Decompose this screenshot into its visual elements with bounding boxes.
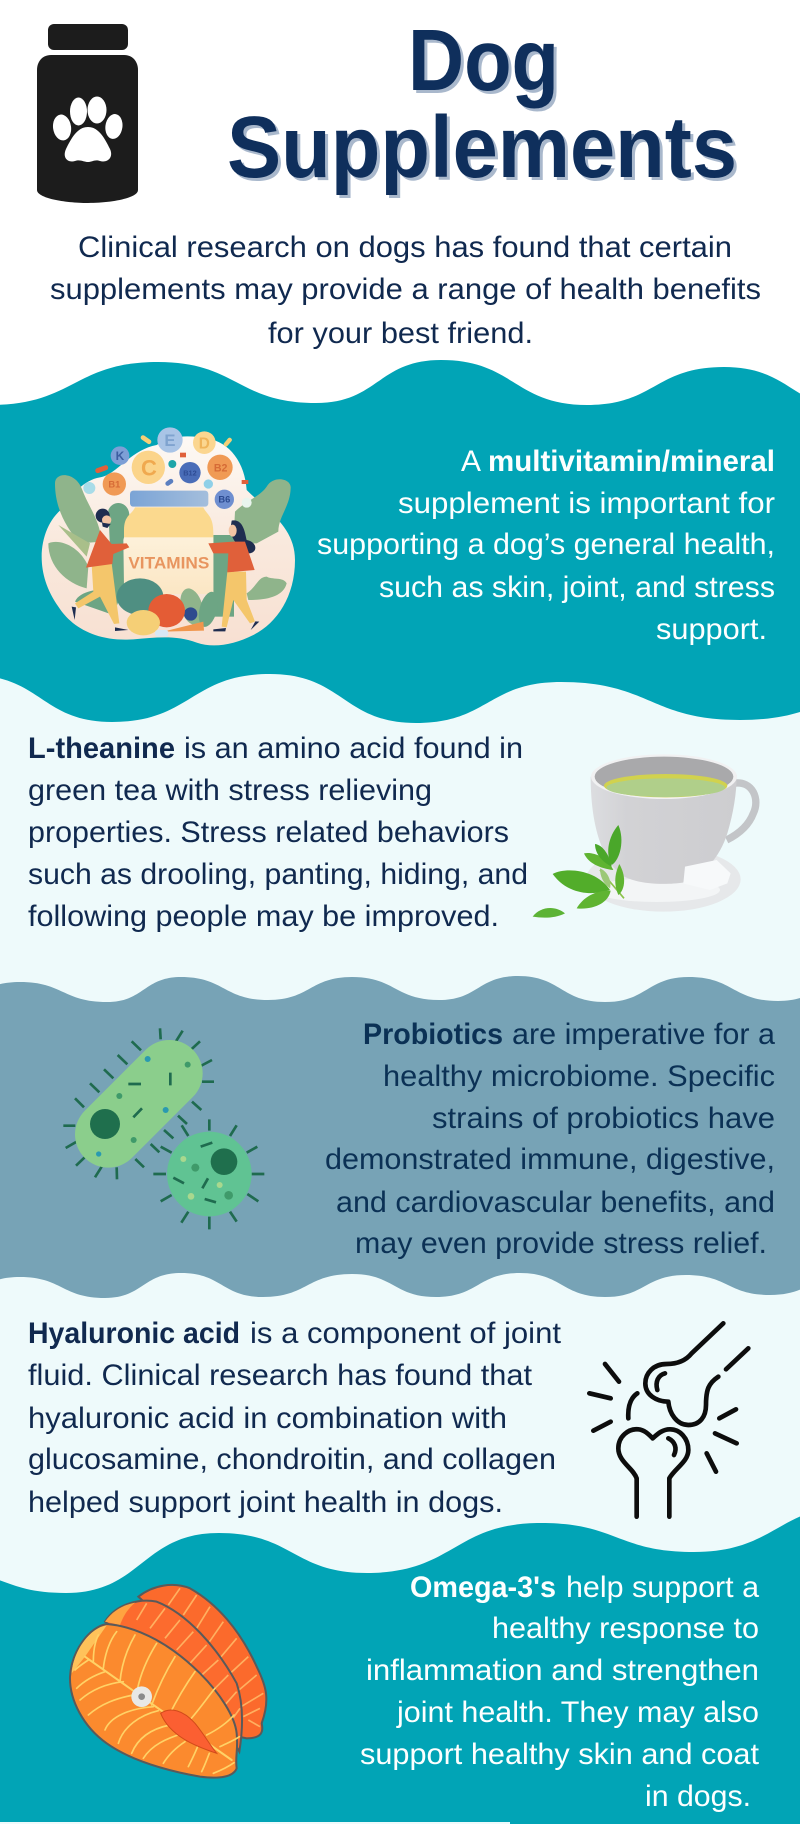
text: L-theanine: following people may be improved. <box>28 900 499 933</box>
text: hyaluronic acid: fluid. Clinical research has found that <box>28 1359 532 1392</box>
text: hyaluronic acid <box>28 1317 561 1519</box>
icon: green tea cup <box>533 754 756 918</box>
title <box>227 12 737 196</box>
icon: joint bones <box>589 1323 748 1517</box>
icon: vitamins illustration: B12 <box>183 468 197 477</box>
text: L-theanine: properties. Stress related behaviors <box>28 816 509 849</box>
text: omega-3 <box>360 1571 760 1813</box>
man figure <box>72 509 129 631</box>
text: probiotics: are imperative for a <box>512 1018 776 1051</box>
icon: vitamins illustration: B6 <box>218 495 230 505</box>
text: probiotics: strains of probiotics have <box>432 1102 775 1135</box>
text: probiotics: healthy microbiome. Specific <box>383 1060 775 1093</box>
text: L-theanine: L-theanine <box>28 732 175 765</box>
text: L-theanine: such as drooling, panting, hiding, and <box>28 858 528 891</box>
text: omega-3: inflammation and strengthen <box>366 1654 759 1687</box>
text: multivitamin: support. <box>656 613 767 646</box>
text: L-theanine: green tea with stress relieving <box>28 774 432 807</box>
bottom edge strip <box>0 1822 510 1824</box>
panel: multivitamin teal band <box>0 360 800 760</box>
text: multivitamin: A <box>461 445 481 478</box>
text: probiotics: Probiotics <box>363 1018 503 1051</box>
panel: hyaluronic acid light band <box>0 1273 800 1620</box>
text: L-theanine: is an amino acid found in <box>184 732 523 765</box>
icon: vitamins illustration: E <box>164 431 176 450</box>
text: omega-3: healthy response to <box>492 1612 759 1645</box>
icon: supplement bottle with paw <box>37 24 138 203</box>
intro text: supplements may provide a range of health benefits <box>50 273 761 306</box>
text: omega-3: Omega-3's <box>410 1571 556 1604</box>
text: omega-3: joint health. They may also <box>396 1696 759 1729</box>
text: multivitamin: supplement is important for <box>398 487 775 520</box>
icon: vitamins illustration: B2 <box>214 462 228 474</box>
text: probiotics <box>325 1018 776 1260</box>
icon: vitamins illustration: VITAMINS <box>128 553 209 572</box>
title: Dog <box>408 12 559 109</box>
text: multivitamin <box>317 445 775 646</box>
icon: vitamins illustration: K <box>116 449 125 463</box>
woman figure <box>208 520 259 631</box>
text: omega-3: help support a <box>566 1571 760 1604</box>
text: probiotics: and cardiovascular benefits, and <box>336 1186 775 1219</box>
vegetables <box>117 578 221 637</box>
text: hyaluronic acid: hyaluronic acid in combination with <box>28 1402 507 1435</box>
text: hyaluronic acid: is a component of joint <box>250 1317 561 1350</box>
text: multivitamin: such as skin, joint, and stress <box>379 571 775 604</box>
icon: vitamins illustration: D <box>199 435 210 452</box>
title: Supplements <box>227 99 737 196</box>
intro text: Clinical research on dogs has found that certain <box>78 231 732 264</box>
text: hyaluronic acid: Hyaluronic acid <box>28 1317 240 1350</box>
icon: vitamins illustration <box>42 427 295 645</box>
intro text <box>50 231 761 350</box>
text: probiotics: demonstrated immune, digestive, <box>325 1143 775 1176</box>
text: multivitamin: multivitamin/mineral <box>488 445 775 478</box>
text: omega-3: support healthy skin and coat <box>360 1738 759 1771</box>
icon: vitamins illustration: B1 <box>108 479 120 489</box>
icon: probiotic bacteria <box>63 1028 264 1229</box>
text: omega-3: in dogs. <box>645 1780 751 1813</box>
icon: salmon steaks <box>70 1585 266 1778</box>
text: L-theanine <box>28 732 528 933</box>
panel: omega-3 teal band <box>0 1505 800 1824</box>
text: hyaluronic acid: glucosamine, chondroitin, and collagen <box>28 1443 556 1476</box>
text: multivitamin: supporting a dog’s general health, <box>317 528 775 561</box>
panel: L-theanine light band <box>0 674 800 1040</box>
text: hyaluronic acid: helped support joint health in dogs. <box>28 1486 503 1519</box>
panel: probiotics slate band <box>0 976 800 1320</box>
intro text: for your best friend. <box>268 317 533 350</box>
icon: vitamins illustration: C <box>141 455 157 480</box>
text: probiotics: may even provide stress relief. <box>355 1227 767 1260</box>
